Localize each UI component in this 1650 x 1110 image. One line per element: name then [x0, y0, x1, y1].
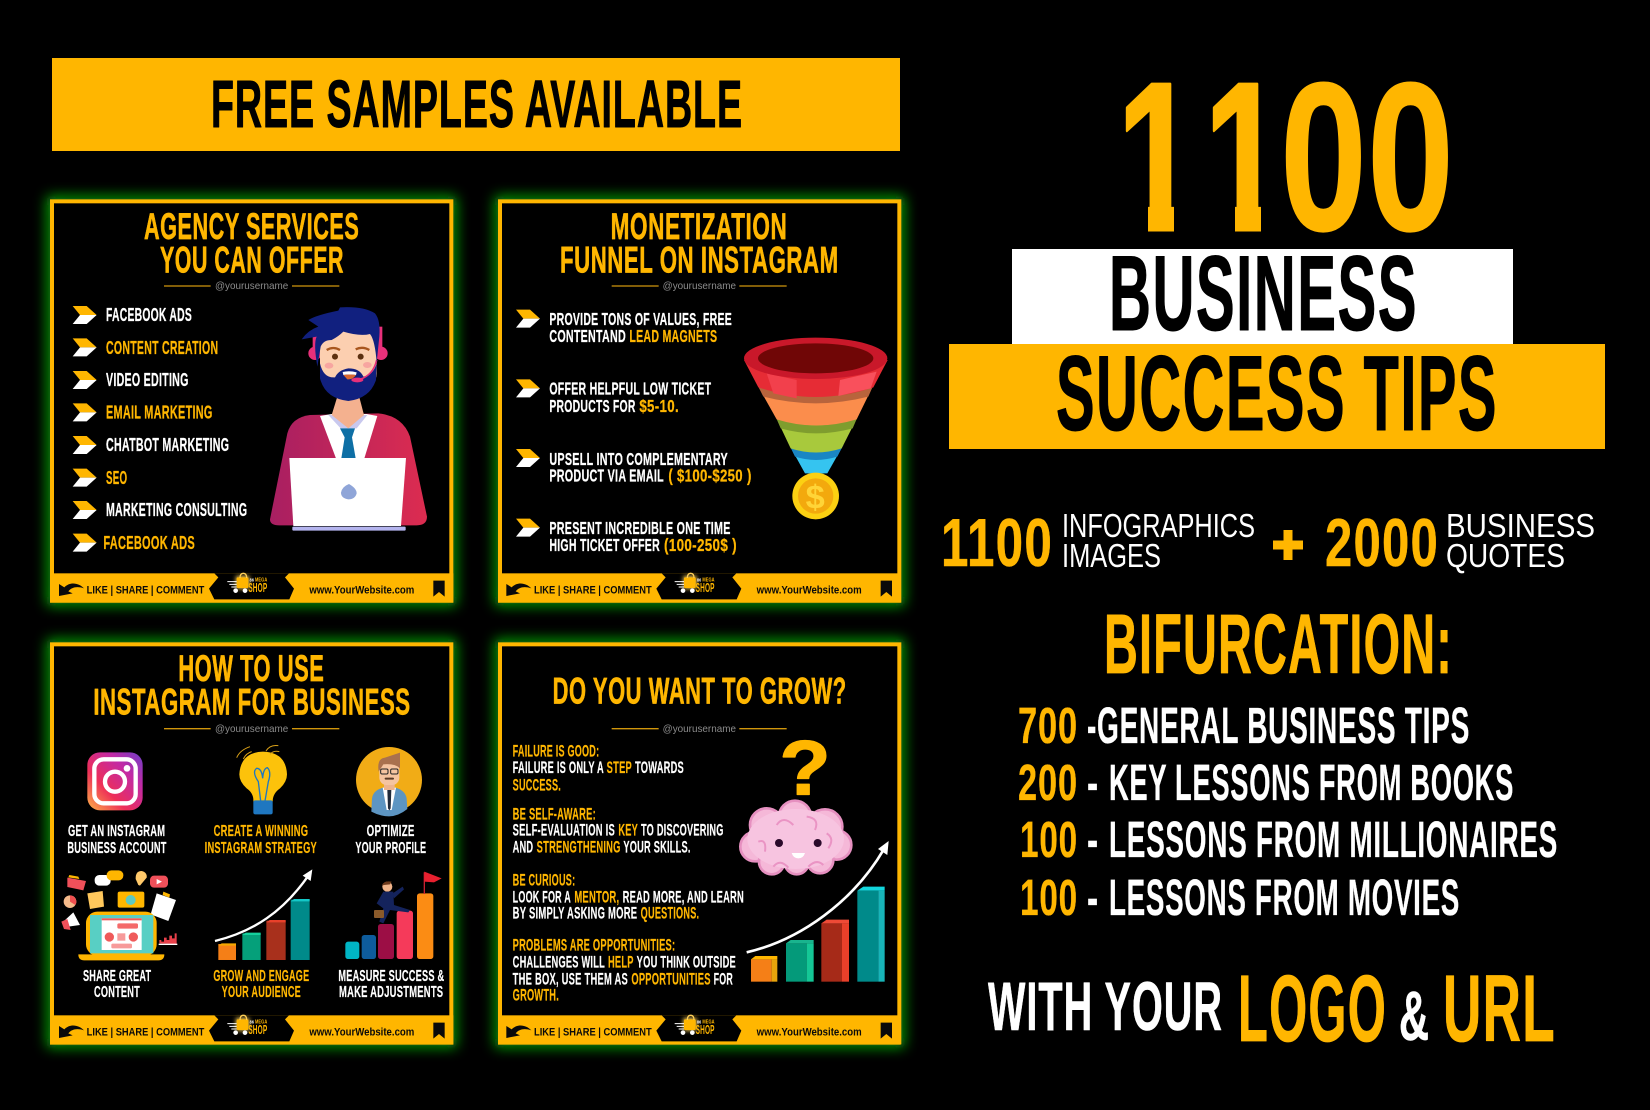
heading: DO YOU WANT TO GROW?	[553, 671, 847, 712]
heading: YOU CAN OFFER	[160, 240, 344, 281]
footer bar: MEGA	[255, 1020, 267, 1026]
captions row one: CREATE A WINNING	[214, 823, 308, 840]
heading: AGENCY SERVICES	[144, 206, 359, 247]
username: @yourusername	[663, 724, 736, 735]
tip: problems are opportunities: PROBLEMS ARE OPPORTUNITIES:	[513, 936, 675, 954]
footer bar: 86	[697, 578, 702, 583]
captions row one: BUSINESS ACCOUNT	[67, 840, 167, 857]
service list: CONTENT CREATION	[106, 337, 218, 358]
tip: be curious: READ MORE, AND LEARN	[623, 888, 744, 906]
heading: HOW TO USE	[178, 648, 324, 689]
panel: how to use instagram	[50, 644, 453, 1045]
captions row one: GET AN INSTAGRAM	[68, 823, 165, 840]
closing line: with your logo and url: &	[1399, 977, 1430, 1055]
tip: be self-aware: SELF-EVALUATION IS	[513, 821, 615, 839]
footer bar: LIKE | SHARE | COMMENT	[87, 1026, 205, 1038]
service list: FACEBOOK ADS	[103, 532, 195, 553]
tip: failure is good: TOWARDS	[635, 759, 684, 777]
username: @yourusername	[215, 281, 289, 292]
footer bar	[498, 1015, 901, 1045]
stats row: 2000	[1325, 505, 1439, 581]
footer bar: SHOP	[248, 1022, 267, 1037]
footer bar: SHOP	[696, 580, 715, 595]
footer bar: MEGA	[702, 578, 715, 584]
banner: free samples	[52, 58, 900, 151]
tip: failure is good	[513, 742, 684, 794]
icon: brain	[740, 801, 851, 874]
tip: problems are opportunities: GROWTH.	[513, 986, 559, 1004]
banner: free samples: FREE SAMPLES AVAILABLE	[211, 67, 743, 142]
footer bar: www.YourWebsite.com	[756, 1026, 862, 1038]
captions row one: INSTAGRAM STRATEGY	[205, 840, 317, 857]
username: @yourusername	[215, 724, 289, 735]
footer bar: www.YourWebsite.com	[756, 584, 862, 596]
tip: problems are opportunities: YOU THINK OUTSIDE	[637, 953, 736, 971]
captions row one: YOUR PROFILE	[355, 840, 426, 857]
stats row	[941, 505, 1595, 581]
heading: MONETIZATION	[611, 206, 787, 247]
footer bar: 86	[250, 1020, 254, 1025]
icon: content collage	[61, 870, 177, 960]
service list: CHATBOT MARKETING	[106, 434, 229, 455]
captions row two: GROW AND ENGAGE	[213, 968, 309, 985]
heading: FUNNEL ON INSTAGRAM	[560, 240, 839, 281]
footer bar: 86	[250, 578, 254, 583]
tip: problems are opportunities: HELP	[608, 953, 634, 971]
footer bar: LIKE | SHARE | COMMENT	[87, 584, 205, 596]
list: bifurcation breakdown: 100	[1020, 869, 1078, 926]
list: bifurcation breakdown: 100	[1020, 811, 1078, 868]
big number 1100	[1117, 38, 1454, 275]
big number 1100: 0	[1280, 38, 1367, 275]
icon: instagram	[87, 752, 143, 810]
closing line: with your logo and url	[988, 956, 1556, 1062]
captions row two: MAKE ADJUSTMENTS	[339, 984, 443, 1001]
footer bar: MEGA	[255, 578, 267, 584]
tip: failure is good: FAILURE IS ONLY A	[513, 759, 604, 777]
tip: be self-aware: BE SELF-AWARE:	[513, 805, 596, 823]
captions row one: OPTIMIZE	[367, 823, 415, 840]
funnel steps: LEAD MAGNETS	[629, 326, 717, 346]
funnel steps: PRODUCTS FOR	[549, 396, 636, 416]
tip: problems are opportunities: FOR	[714, 970, 733, 988]
footer bar: LIKE | SHARE | COMMENT	[534, 1026, 652, 1038]
big number 1100: 0	[1367, 38, 1454, 275]
heading	[93, 648, 411, 722]
footer bar: 86	[697, 1020, 702, 1025]
chart: man climbing bars	[345, 872, 442, 959]
footer bar	[50, 573, 453, 603]
tip: problems are opportunities	[513, 936, 736, 1004]
panel: monetization funnel	[498, 201, 901, 603]
chart: growth bars	[215, 869, 312, 960]
big number 1100: 1	[1204, 38, 1284, 275]
list: bifurcation breakdown: -	[1087, 869, 1099, 926]
stats row: BUSINESS	[1446, 507, 1595, 544]
tip: be self-aware	[513, 805, 724, 856]
footer bar: www.YourWebsite.com	[308, 584, 414, 596]
big number 1100: 1	[1117, 38, 1197, 275]
captions row two: MEASURE SUCCESS &	[338, 968, 444, 985]
closing line: with your logo and url: LOGO	[1238, 956, 1387, 1062]
tip: problems are opportunities: OPPORTUNITIES	[631, 970, 711, 988]
service list: EMAIL MARKETING	[106, 402, 213, 423]
list: bifurcation breakdown: -	[1087, 811, 1099, 868]
icon: question mark: ?	[779, 725, 833, 811]
tip: be curious	[513, 871, 744, 922]
panel: agency services	[50, 201, 453, 603]
captions row two	[83, 968, 444, 1001]
funnel steps	[516, 309, 752, 555]
funnel steps: HIGH TICKET OFFER	[549, 535, 660, 555]
tip: be curious: BY SIMPLY ASKING MORE	[513, 904, 637, 922]
captions row two: CONTENT	[94, 984, 140, 1001]
tip: be self-aware: YOUR SKILLS.	[623, 838, 691, 856]
tip: be self-aware: STRENGTHENING	[537, 838, 621, 856]
footer bar: SHOP	[248, 580, 267, 595]
service list: FACEBOOK ADS	[106, 304, 192, 325]
funnel steps: PRESENT INCREDIBLE ONE TIME	[549, 518, 731, 538]
funnel steps: (100-250$ )	[664, 535, 737, 555]
tip: be curious: BE CURIOUS:	[513, 871, 575, 889]
closing line: with your logo and url: URL	[1443, 956, 1556, 1062]
list: bifurcation breakdown: 700	[1018, 697, 1078, 754]
service list: SEO	[106, 467, 127, 488]
service list	[73, 304, 247, 553]
illustration: funnel	[744, 338, 888, 519]
funnel steps: OFFER HELPFUL LOW TICKET	[549, 379, 711, 399]
list: bifurcation breakdown: 200	[1018, 754, 1078, 811]
captions row two: SHARE GREAT	[83, 968, 151, 985]
chart: growth bars	[747, 841, 889, 982]
stats row: IMAGES	[1062, 537, 1161, 574]
tip: problems are opportunities: CHALLENGES WILL	[513, 953, 605, 971]
tip: be self-aware: KEY	[618, 821, 638, 839]
captions row one	[67, 823, 426, 857]
tip: failure is good: FAILURE IS GOOD:	[513, 742, 599, 760]
heading	[560, 206, 839, 281]
funnel steps: CONTENTAND	[549, 326, 626, 346]
service list: VIDEO EDITING	[106, 369, 189, 390]
username: @yourusername	[663, 281, 736, 292]
tip: be self-aware: TO DISCOVERING	[641, 821, 724, 839]
stats row: 1100	[941, 505, 1053, 581]
illustration: man with laptop	[270, 307, 427, 531]
tip: be curious: MENTOR,	[574, 888, 619, 906]
tip: failure is good: STEP	[607, 759, 632, 777]
heading	[144, 206, 359, 281]
footer bar	[498, 573, 901, 603]
funnel steps: PRODUCT VIA EMAIL	[549, 465, 664, 485]
footer bar: MEGA	[702, 1020, 715, 1026]
funnel steps: UPSELL INTO COMPLEMENTARY	[549, 449, 728, 469]
list: bifurcation breakdown: -	[1087, 754, 1099, 811]
closing line: with your logo and url: WITH YOUR	[988, 968, 1223, 1045]
icon: light bulb	[237, 745, 287, 814]
captions row two: YOUR AUDIENCE	[222, 984, 301, 1001]
title block: business success tips	[949, 233, 1605, 453]
heading: INSTAGRAM FOR BUSINESS	[93, 681, 411, 722]
icon: profile	[356, 747, 422, 816]
footer bar	[50, 1015, 453, 1045]
tip: be self-aware: AND	[513, 838, 533, 856]
footer bar: SHOP	[696, 1022, 715, 1037]
tip: problems are opportunities: THE BOX, USE THEM AS	[513, 970, 628, 988]
tip: be curious: QUESTIONS.	[641, 904, 699, 922]
stats row: INFOGRAPHICS	[1062, 507, 1255, 544]
illustration: funnel: $	[806, 479, 826, 516]
footer bar: www.YourWebsite.com	[308, 1026, 414, 1038]
service list: MARKETING CONSULTING	[106, 499, 247, 520]
tip: failure is good: SUCCESS.	[513, 776, 561, 794]
footer bar: LIKE | SHARE | COMMENT	[534, 584, 652, 596]
tip: be curious: LOOK FOR A	[513, 888, 571, 906]
panel: do you want to grow	[498, 644, 901, 1045]
funnel steps: PROVIDE TONS OF VALUES, FREE	[549, 309, 732, 329]
list: bifurcation breakdown	[1018, 697, 1558, 926]
funnel steps: ( $100-$250 )	[668, 465, 752, 485]
stats row: QUOTES	[1446, 537, 1565, 574]
funnel steps: $5-10.	[639, 396, 679, 416]
